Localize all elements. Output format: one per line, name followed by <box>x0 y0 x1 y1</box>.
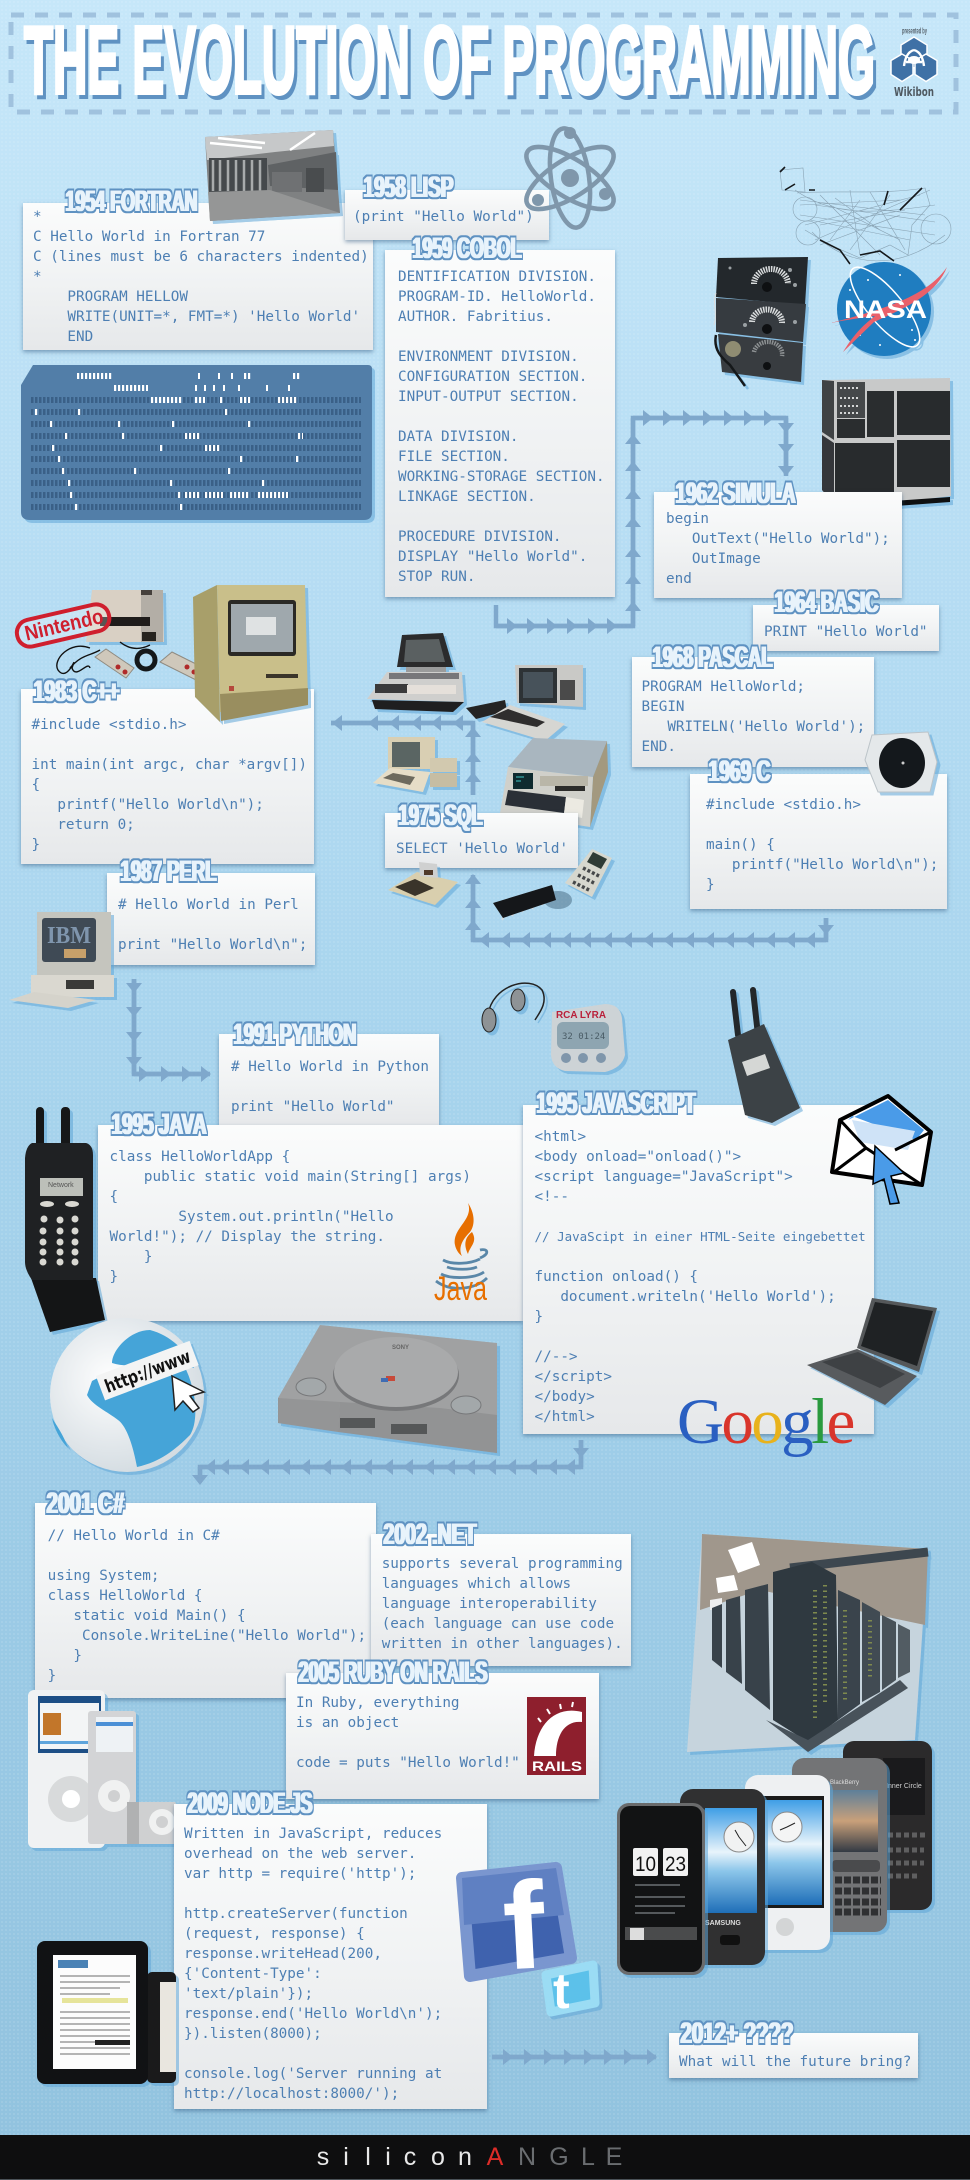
heading: 1987 Perl: 1987 PERL <box>120 855 216 888</box>
icon: Twitter <box>538 1960 600 2018</box>
panel: 1959 COBOL <box>385 250 615 597</box>
photo: server room <box>687 1534 928 1752</box>
phone: HTC touch: 23 <box>665 1853 686 1876</box>
panel: 2012+ future <box>669 2033 918 2078</box>
logo: Google: Google <box>677 1386 854 1458</box>
phone: BlackBerry <box>792 1758 887 1932</box>
logo: Java <box>434 1203 488 1308</box>
phone: HTC QWERTY <box>843 1741 932 1910</box>
panel: 1975 SQL <box>385 813 578 868</box>
phone: Samsung <box>680 1789 765 1965</box>
footer logo: siliconANGLE: silicon <box>317 2143 472 2171</box>
header frame <box>8 12 958 114</box>
icon: Facebook: f <box>500 1856 549 1996</box>
image: candy-bar phone: Network <box>48 1182 74 1189</box>
image: PlayStation <box>278 1325 499 1454</box>
heading: 2012+ ????: 2012+ ???? <box>680 2017 794 2050</box>
ipod nano <box>88 1711 136 1844</box>
footer logo: siliconANGLE: A <box>487 2143 504 2171</box>
logo: Java: Java <box>434 1270 487 1308</box>
footer bar <box>0 2135 970 2180</box>
panel: 2001 C# <box>35 1503 376 1698</box>
code: COBOL: DENTIFICATION DIVISION. PROGRAM-ID. HelloWorld. AUTHOR. Fabritius. ENVIRONMENT DIVISION. CONFIGURATION SECTION. INPUT-OUTPUT SECTION. DATA DIVISION. FILE SECTION. WORKING-STORAGE SECTION. LINKAGE SECTION. PROCEDURE DIVISION. DISPLAY "Hello World". STOP RUN. <box>398 269 605 585</box>
heading: 1962 Simula: 1962 SIMULA <box>676 477 796 510</box>
code: BASIC: PRINT "Hello World" <box>764 624 928 640</box>
logo: Rails: RAILS <box>532 1758 582 1774</box>
footer logo: siliconANGLE: NGLE <box>518 2143 622 2171</box>
text: future question: What will the future bring? <box>679 2054 911 2070</box>
icon: atom <box>524 126 616 230</box>
phone: HTC touch <box>617 1803 705 1975</box>
image: hexagonal disc <box>864 732 940 796</box>
panel: 2009 Node.js <box>174 1804 487 2109</box>
arrow: Node.js to future <box>490 2046 660 2068</box>
icon: envelope <box>830 1093 936 1207</box>
heading: 1958 Lisp: 1958 LISP <box>364 171 454 204</box>
code: C#: // Hello World in C# using System; class HelloWorld { static void Main() { Console.WriteLine("Hello World"); } } <box>48 1528 366 1684</box>
image: TRS-80 <box>466 665 586 739</box>
heading: 2009 Node.js: 2009 NODE.JS <box>188 1787 313 1820</box>
icon: Twitter: t <box>553 1963 570 2019</box>
image: integrated chip <box>493 885 572 920</box>
ipod shuffle <box>127 1802 176 1844</box>
nintendo logo: Nintendo <box>23 605 106 645</box>
image: Atari computer <box>388 862 461 908</box>
image: headphones and pager: 32 01:24 <box>562 1032 605 1042</box>
arrow: C to SQL <box>465 874 834 948</box>
panel: 1995 Java <box>98 1125 523 1321</box>
photo: IBM computer room <box>205 130 343 224</box>
phone: white Android <box>745 1775 830 1950</box>
panel: 2005 Ruby on Rails <box>286 1673 599 1799</box>
code: Pascal: PROGRAM HelloWorld; BEGIN WRITELN('Hello World'); END. <box>642 679 865 755</box>
code: Ruby: In Ruby, everything is an object code = puts "Hello World!" <box>296 1695 520 1771</box>
heading: 1991 Python: 1991 PYTHON <box>234 1018 357 1051</box>
heading: 1968 Pascal: 1968 PASCAL <box>652 641 772 674</box>
heading: 2002 .NET: 2002 .NET <box>384 1518 476 1551</box>
image: headphones and pager: RCA LYRA <box>556 1010 606 1021</box>
logo: Wikibon <box>890 26 938 99</box>
image: calculator <box>565 849 615 900</box>
image: Commodore PET <box>367 633 467 715</box>
panel: 1964 BASIC <box>753 605 939 651</box>
heading: 1959 COBOL: 1959 COBOL <box>412 232 522 265</box>
heading: 1995 Java: 1995 JAVA <box>112 1108 206 1141</box>
panel: 1958 Lisp <box>345 190 549 240</box>
image: Macintosh <box>193 585 311 725</box>
image: IBM 5100 <box>500 738 611 830</box>
panel: 1954 Fortran <box>23 203 373 350</box>
image: Nintendo console and logo <box>14 590 195 680</box>
image: laptop <box>807 1298 937 1406</box>
code: Lisp: (print "Hello World") <box>353 209 534 225</box>
phone: BlackBerry: BlackBerry <box>830 1780 859 1786</box>
phone: Samsung: SAMSUNG <box>705 1920 741 1927</box>
phone: HTC QWERTY: Inner Circle <box>886 1783 922 1790</box>
code: Python: # Hello World in Python print "Hello World" <box>231 1059 429 1115</box>
code: C++: #include <stdio.h> int main(int argc, char *argv[]) { printf("Hello World\n"); return 0; } <box>32 717 307 853</box>
icon: Facebook <box>454 1860 580 1985</box>
image: headphones and pager <box>482 982 628 1075</box>
arrow: JavaScript to C# <box>190 1436 590 1488</box>
panel: 1968 Pascal <box>632 657 874 767</box>
image: network map <box>780 166 952 264</box>
footer logo: siliconANGLE <box>310 2143 630 2173</box>
heading: 2001 C#: 2001 C# <box>46 1487 125 1520</box>
phone: HTC touch: 10 <box>635 1853 656 1876</box>
text: .NET: supports several programming languages which allows language interoperability (each language can use code written in other languages). <box>382 1556 623 1652</box>
heading: 1983 C++: 1983 C++ <box>34 675 120 708</box>
image: globe with URL bar <box>50 1318 208 1474</box>
ipod classic <box>28 1690 105 1848</box>
image: iPads <box>37 1941 177 2085</box>
image: punch card <box>21 365 375 523</box>
code: SQL: SELECT 'Hello World' <box>396 841 568 857</box>
image: Apple II <box>373 737 460 795</box>
heading: 1954 Fortran: 1954 FORTRAN <box>66 185 198 218</box>
panel: 1969 C <box>690 774 947 909</box>
image: globe with URL bar: http://www <box>102 1346 194 1398</box>
heading: 1975 SQL: 1975 SQL <box>398 799 482 832</box>
controllers <box>95 649 204 680</box>
nes console <box>86 590 164 642</box>
image: PlayStation: SONY <box>392 1345 409 1351</box>
logo: NASA: NASA <box>844 296 927 324</box>
panel: 1983 C++ <box>21 689 314 864</box>
image: mainframe computer <box>822 378 954 509</box>
image: phone above JavaScript panel <box>727 989 801 1123</box>
arrow: SQL to C++ <box>331 715 481 795</box>
heading: 2005 Ruby on Rails: 2005 RUBY ON RAILS <box>298 1656 488 1689</box>
image: radio equipment <box>714 257 811 390</box>
image: candy-bar phone <box>25 1107 108 1335</box>
panel: 1962 Simula <box>654 492 902 598</box>
panel: 1987 Perl <box>107 873 315 965</box>
image: smartphones <box>617 1741 933 1976</box>
logo: Rails <box>527 1697 586 1775</box>
code: Java: class HelloWorldApp { public static void main(String[] args) { System.out.println("Hello World!"); // Display the string. } } <box>110 1149 471 1285</box>
arrow: Perl to Python <box>126 979 211 1082</box>
image: IBM PC <box>10 912 117 1011</box>
image: IBM PC: IBM <box>47 923 91 949</box>
heading: 1995 JavaScript: 1995 JAVASCRIPT <box>536 1087 696 1120</box>
logo: NASA <box>832 262 950 359</box>
heading: 1969 C: 1969 C <box>708 755 770 788</box>
logo: Wikibon: Wikibon <box>894 85 934 99</box>
logo: Wikibon: presented by <box>902 26 927 36</box>
panel: 1995 JavaScript <box>523 1105 874 1434</box>
heading: 1964 BASIC: 1964 BASIC <box>774 586 878 619</box>
code: Fortran: * C Hello World in Fortran 77 C (lines must be 6 characters indented) * PROGRAM HELLOW WRITE(UNIT=*, FMT=*) 'Hello World' END <box>33 209 369 345</box>
image: iPods <box>28 1690 176 1848</box>
arrow: COBOL to Simula <box>494 410 794 634</box>
code: JavaScript: <html> <body onload="onload()"> <script language="JavaScript"> <!-- // JavaScipt in einer HTML-Seite eingebettet function onload() { document.writeln('Hello World'); } //--> </script> </body> </html> <box>534 1129 866 1425</box>
code: C: #include <stdio.h> main() { printf("Hello World\n"); } <box>706 797 938 893</box>
code: Node.js: Written in JavaScript, reduces overhead on the web server. var http = require('http'); http.createServer(function (request, response) { response.writeHead(200, {'Content-Type': 'text/plain'}); response.end('Hello World\n'); }).listen(8000); console.log('Server running at http://localhost:8000/'); <box>184 1826 442 2102</box>
panel: 2002 .NET <box>371 1534 631 1666</box>
code: Simula: begin OutText("Hello World"); OutImage end <box>666 511 890 587</box>
panel: 1991 Python <box>219 1034 439 1125</box>
code: Perl: # Hello World in Perl print "Hello World\n"; <box>118 897 307 953</box>
